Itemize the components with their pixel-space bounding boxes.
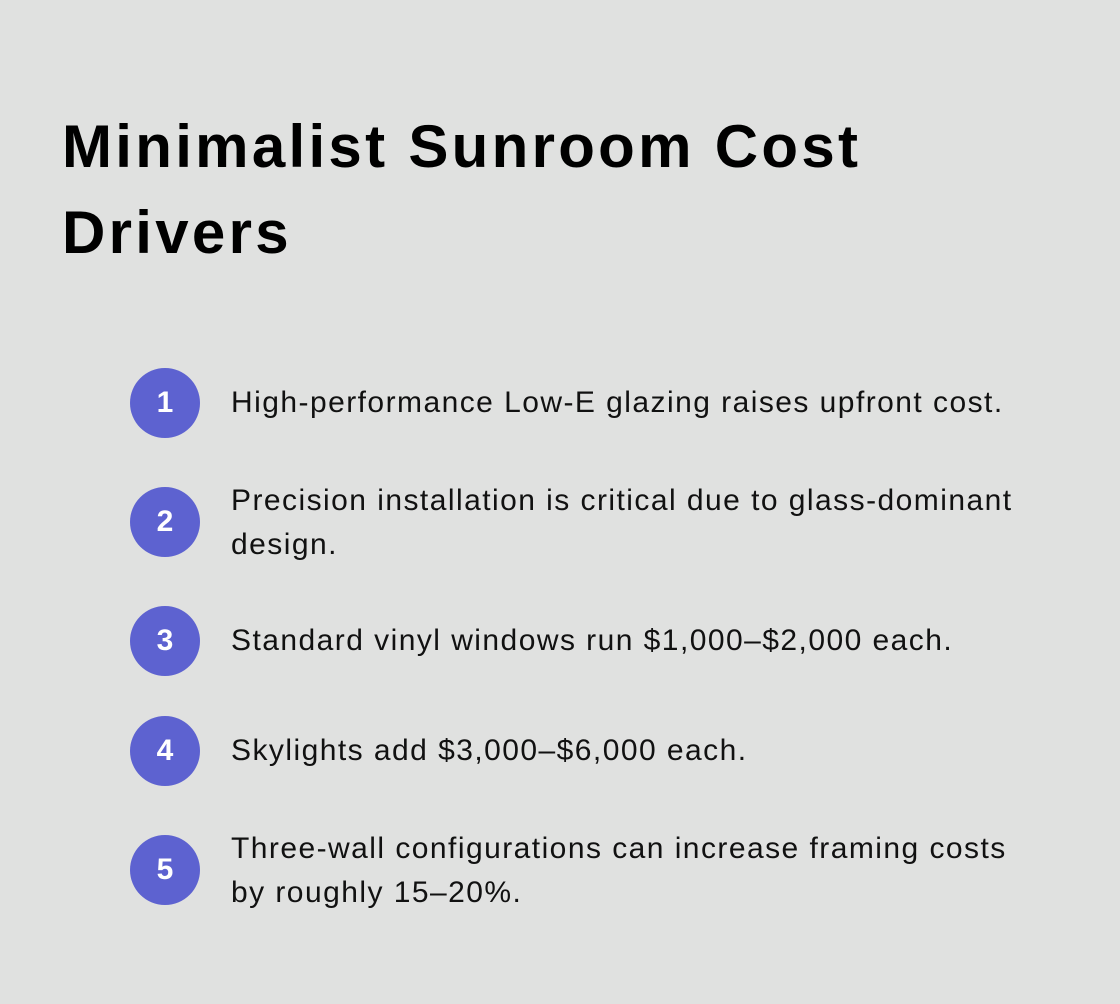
item 1: High-performance Low-E glazing raises upfront cost. bbox=[231, 386, 1004, 419]
item 4 bbox=[130, 716, 748, 786]
item 3: 3 bbox=[157, 624, 173, 657]
title: Minimalist Sunroom Cost Drivers bbox=[62, 113, 861, 266]
item 1: 1 bbox=[157, 386, 173, 419]
item 5: Three-wall configurations can increase framing costs by roughly 15–20%. bbox=[231, 832, 1007, 909]
item 2: 2 bbox=[157, 505, 173, 538]
item 4: 4 bbox=[157, 734, 173, 767]
item 4: Skylights add $3,000–$6,000 each. bbox=[231, 734, 748, 767]
item 3: Standard vinyl windows run $1,000–$2,000 each. bbox=[231, 624, 953, 657]
item 1 bbox=[130, 368, 1004, 438]
item 3 bbox=[130, 606, 953, 676]
item 2: Precision installation is critical due to glass-dominant design. bbox=[231, 484, 1013, 561]
item 5: 5 bbox=[157, 853, 173, 886]
